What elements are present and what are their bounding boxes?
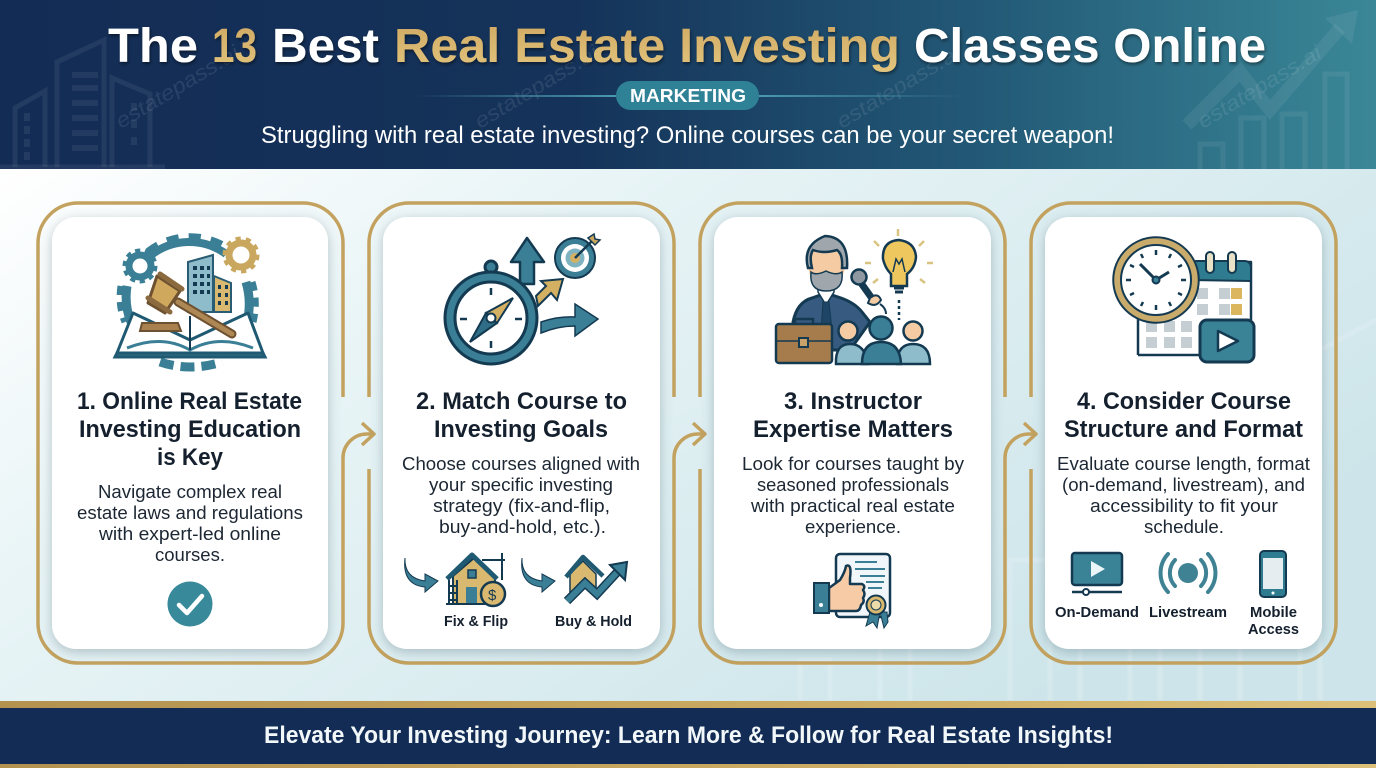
category tag: marketing bbox=[415, 81, 965, 110]
title: Real Estate Investing bbox=[394, 20, 900, 73]
body text: experience. bbox=[805, 517, 901, 537]
body text: with expert-led online bbox=[98, 524, 281, 544]
page background bbox=[0, 169, 1376, 701]
gold frame 3 bbox=[700, 203, 1035, 663]
body text: estate laws and regulations bbox=[77, 503, 303, 523]
heading: Expertise Matters bbox=[753, 416, 953, 443]
decorative buildings bbox=[0, 40, 165, 167]
subtitle: Struggling with real estate investing? Online courses can be your secret weapon! bbox=[261, 122, 1114, 149]
heading: 2. Match Course to bbox=[416, 388, 627, 415]
body text: accessibility to fit your bbox=[1090, 496, 1278, 516]
heading: Investing Education bbox=[79, 416, 301, 443]
panel 3: instructor expertise bbox=[700, 203, 1036, 663]
icon: law book gavel and gears bbox=[115, 237, 265, 367]
watermarks bbox=[118, 44, 1320, 127]
gold frame 4 bbox=[1031, 203, 1336, 663]
call to action: Elevate Your Investing Journey: Learn More & Follow for Real Estate Insights! bbox=[264, 722, 1113, 749]
label: mobile access: Mobile bbox=[1250, 604, 1297, 621]
decorative rising chart bbox=[1187, 10, 1358, 169]
footer band bbox=[0, 701, 1376, 768]
header band bbox=[0, 0, 1376, 169]
label: buy and hold: Buy & Hold bbox=[555, 613, 632, 630]
icon: on-demand video bbox=[1072, 553, 1122, 595]
title: Best bbox=[272, 20, 379, 73]
label: mobile access bbox=[1248, 604, 1299, 638]
icon: fix and flip: $ bbox=[488, 587, 497, 604]
faint skyline background bbox=[800, 320, 1376, 700]
watermarks: estatepass.ai bbox=[471, 41, 604, 133]
heading bbox=[77, 388, 302, 471]
icon: livestream bbox=[1161, 554, 1215, 592]
body text: (on-demand, livestream), and bbox=[1062, 475, 1305, 495]
category tag: marketing: MARKETING bbox=[630, 86, 746, 106]
body text bbox=[77, 482, 303, 565]
heading: 3. Instructor bbox=[784, 388, 922, 415]
icon: thumbs up certificate bbox=[814, 554, 890, 628]
body text: Navigate complex real bbox=[98, 482, 282, 502]
label: livestream: Livestream bbox=[1149, 604, 1227, 621]
icon: instructor with audience and lightbulb bbox=[776, 229, 933, 364]
title: Classes Online bbox=[914, 20, 1266, 73]
body text: schedule. bbox=[1144, 517, 1224, 537]
body text: buy-and-hold, etc.). bbox=[439, 517, 606, 537]
body text bbox=[1057, 454, 1310, 537]
body text: Choose courses aligned with bbox=[402, 454, 640, 474]
heading: 1. Online Real Estate bbox=[77, 388, 302, 415]
panel 2: match goals bbox=[369, 203, 705, 663]
icon: check badge bbox=[168, 582, 212, 626]
heading: Investing Goals bbox=[434, 416, 608, 443]
icon: fix and flip bbox=[405, 553, 505, 606]
body text: Evaluate course length, format bbox=[1057, 454, 1310, 474]
icon: buy and hold bbox=[522, 557, 627, 601]
watermarks: estatepass.ai bbox=[112, 41, 245, 133]
body text: Look for courses taught by bbox=[742, 454, 964, 474]
label: fix and flip: Fix & Flip bbox=[444, 613, 508, 630]
watermarks: estatepass.ai bbox=[1194, 41, 1327, 133]
body text: seasoned professionals bbox=[757, 475, 949, 495]
gold frame 1 bbox=[38, 203, 373, 663]
body text: strategy (fix-and-flip, bbox=[433, 496, 610, 516]
title: The bbox=[108, 20, 198, 73]
heading: 4. Consider Course bbox=[1077, 388, 1291, 415]
heading: Structure and Format bbox=[1064, 416, 1303, 443]
body text: with practical real estate bbox=[750, 496, 955, 516]
body text: courses. bbox=[155, 545, 225, 565]
panel 4: course structure bbox=[1031, 203, 1336, 663]
icon: compass with arrows and target bbox=[445, 234, 600, 364]
heading bbox=[416, 388, 627, 443]
icon: clock calendar and video bbox=[1114, 238, 1254, 362]
label: mobile access: Access bbox=[1248, 621, 1299, 638]
panel 1: online education bbox=[38, 203, 374, 663]
heading: is Key bbox=[157, 444, 224, 471]
body text bbox=[402, 454, 640, 537]
title bbox=[108, 20, 1266, 73]
title: 13 bbox=[212, 20, 257, 73]
body text bbox=[742, 454, 964, 537]
icon: mobile phone bbox=[1260, 551, 1286, 597]
heading bbox=[753, 388, 953, 443]
body text: your specific investing bbox=[429, 475, 613, 495]
heading bbox=[1064, 388, 1303, 443]
label: on-demand: On-Demand bbox=[1055, 604, 1139, 621]
watermarks: estatepass.ai bbox=[833, 41, 966, 133]
gold frame 2 bbox=[369, 203, 704, 663]
